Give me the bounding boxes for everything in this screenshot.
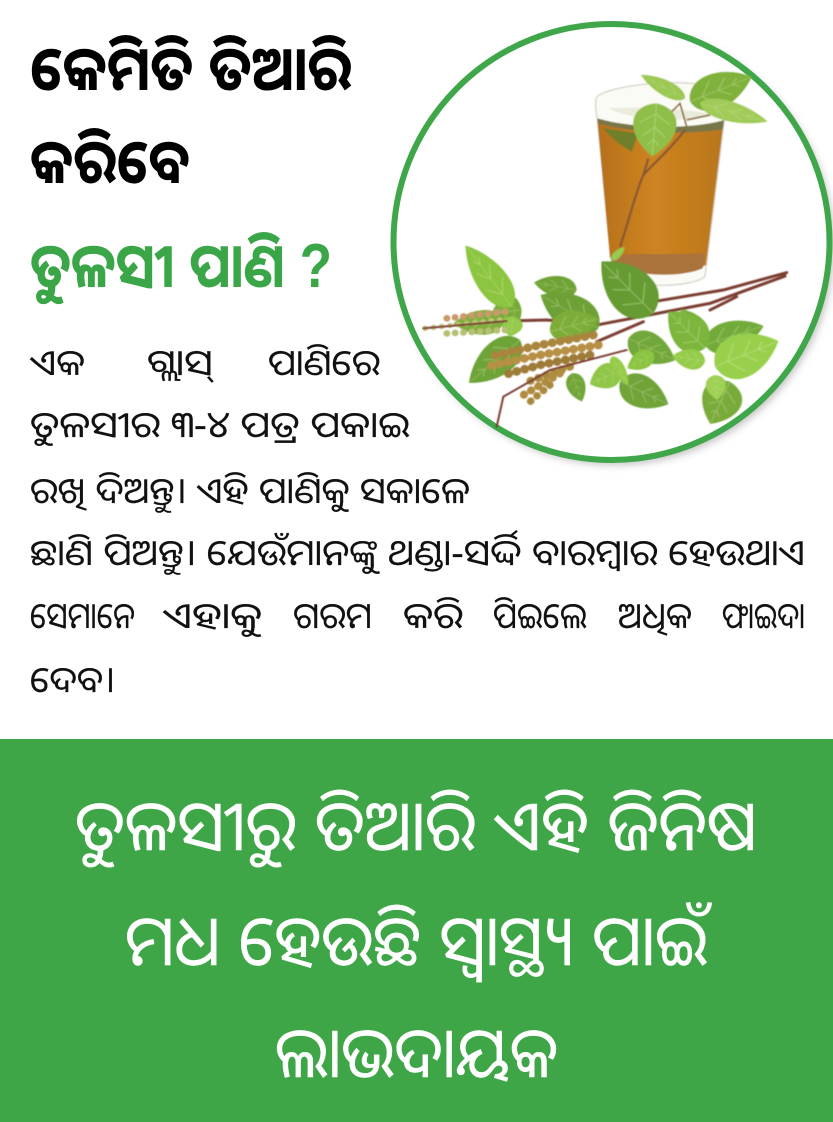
- icon: tulsi sprig: [423, 236, 787, 432]
- body paragraph: ତୁଳସୀର ୩-୪ ପତ୍ର ପକାଇ: [30, 404, 410, 446]
- body paragraph: ଏକ: [29, 342, 85, 383]
- body paragraph: ଗରମ: [293, 595, 372, 636]
- body paragraph: ଅଧିକ: [618, 595, 692, 636]
- body paragraph: ପିଇଲେ: [493, 595, 587, 636]
- heading: tulsi water: ତୁଳସୀ ପାଣି ?: [30, 232, 332, 305]
- body paragraph: [29, 342, 805, 700]
- title: how to make: କେମିତି ତିଆରି: [30, 35, 352, 104]
- banner: tulsi products are also beneficial for health: ତୁଳସୀରୁ ତିଆରି ଏହି ଜିନିଷ: [75, 787, 757, 868]
- banner: tulsi products are also beneficial for health: ଲାଭଦାୟକ: [275, 1014, 558, 1092]
- icon: glass of tulsi tea: [596, 83, 724, 285]
- body paragraph: କରି: [403, 595, 463, 636]
- body paragraph: ଫାଇଦା: [722, 595, 805, 636]
- title: how to make: [30, 35, 352, 197]
- icon: leaves on glass: [630, 60, 770, 158]
- banner: tulsi products are also beneficial for health: ମଧ ହେଉଛି ସ୍ୱାସ୍ଥ୍ୟ ପାଇଁ: [125, 902, 712, 983]
- body paragraph: ଦେବ ।: [30, 659, 115, 700]
- illustration: tulsi tea in circle: [394, 24, 833, 465]
- body paragraph: ଗ୍ଲାସ୍: [147, 342, 214, 383]
- title: how to make: କରିବେ: [30, 128, 190, 197]
- body paragraph: ଛାଣି ପିଅନ୍ତୁ । ଯେଉଁମାନଙ୍କୁ ଥଣ୍ଡା-ସର୍ଦ୍ଦି ବାରମ୍ବାର ହେଉଥାଏ: [30, 530, 805, 575]
- body paragraph: ସେମାନେ: [30, 595, 135, 636]
- banner: tulsi products are also beneficial for health: [0, 739, 833, 1122]
- body paragraph: ପାଣିରେ: [268, 342, 380, 383]
- flower spikes: [425, 312, 598, 402]
- body paragraph: ଏହାକୁ: [162, 595, 262, 637]
- body paragraph: ରଖି ଦିଅନ୍ତୁ । ଏହି ପାଣିକୁ ସକାଳେ: [30, 470, 470, 513]
